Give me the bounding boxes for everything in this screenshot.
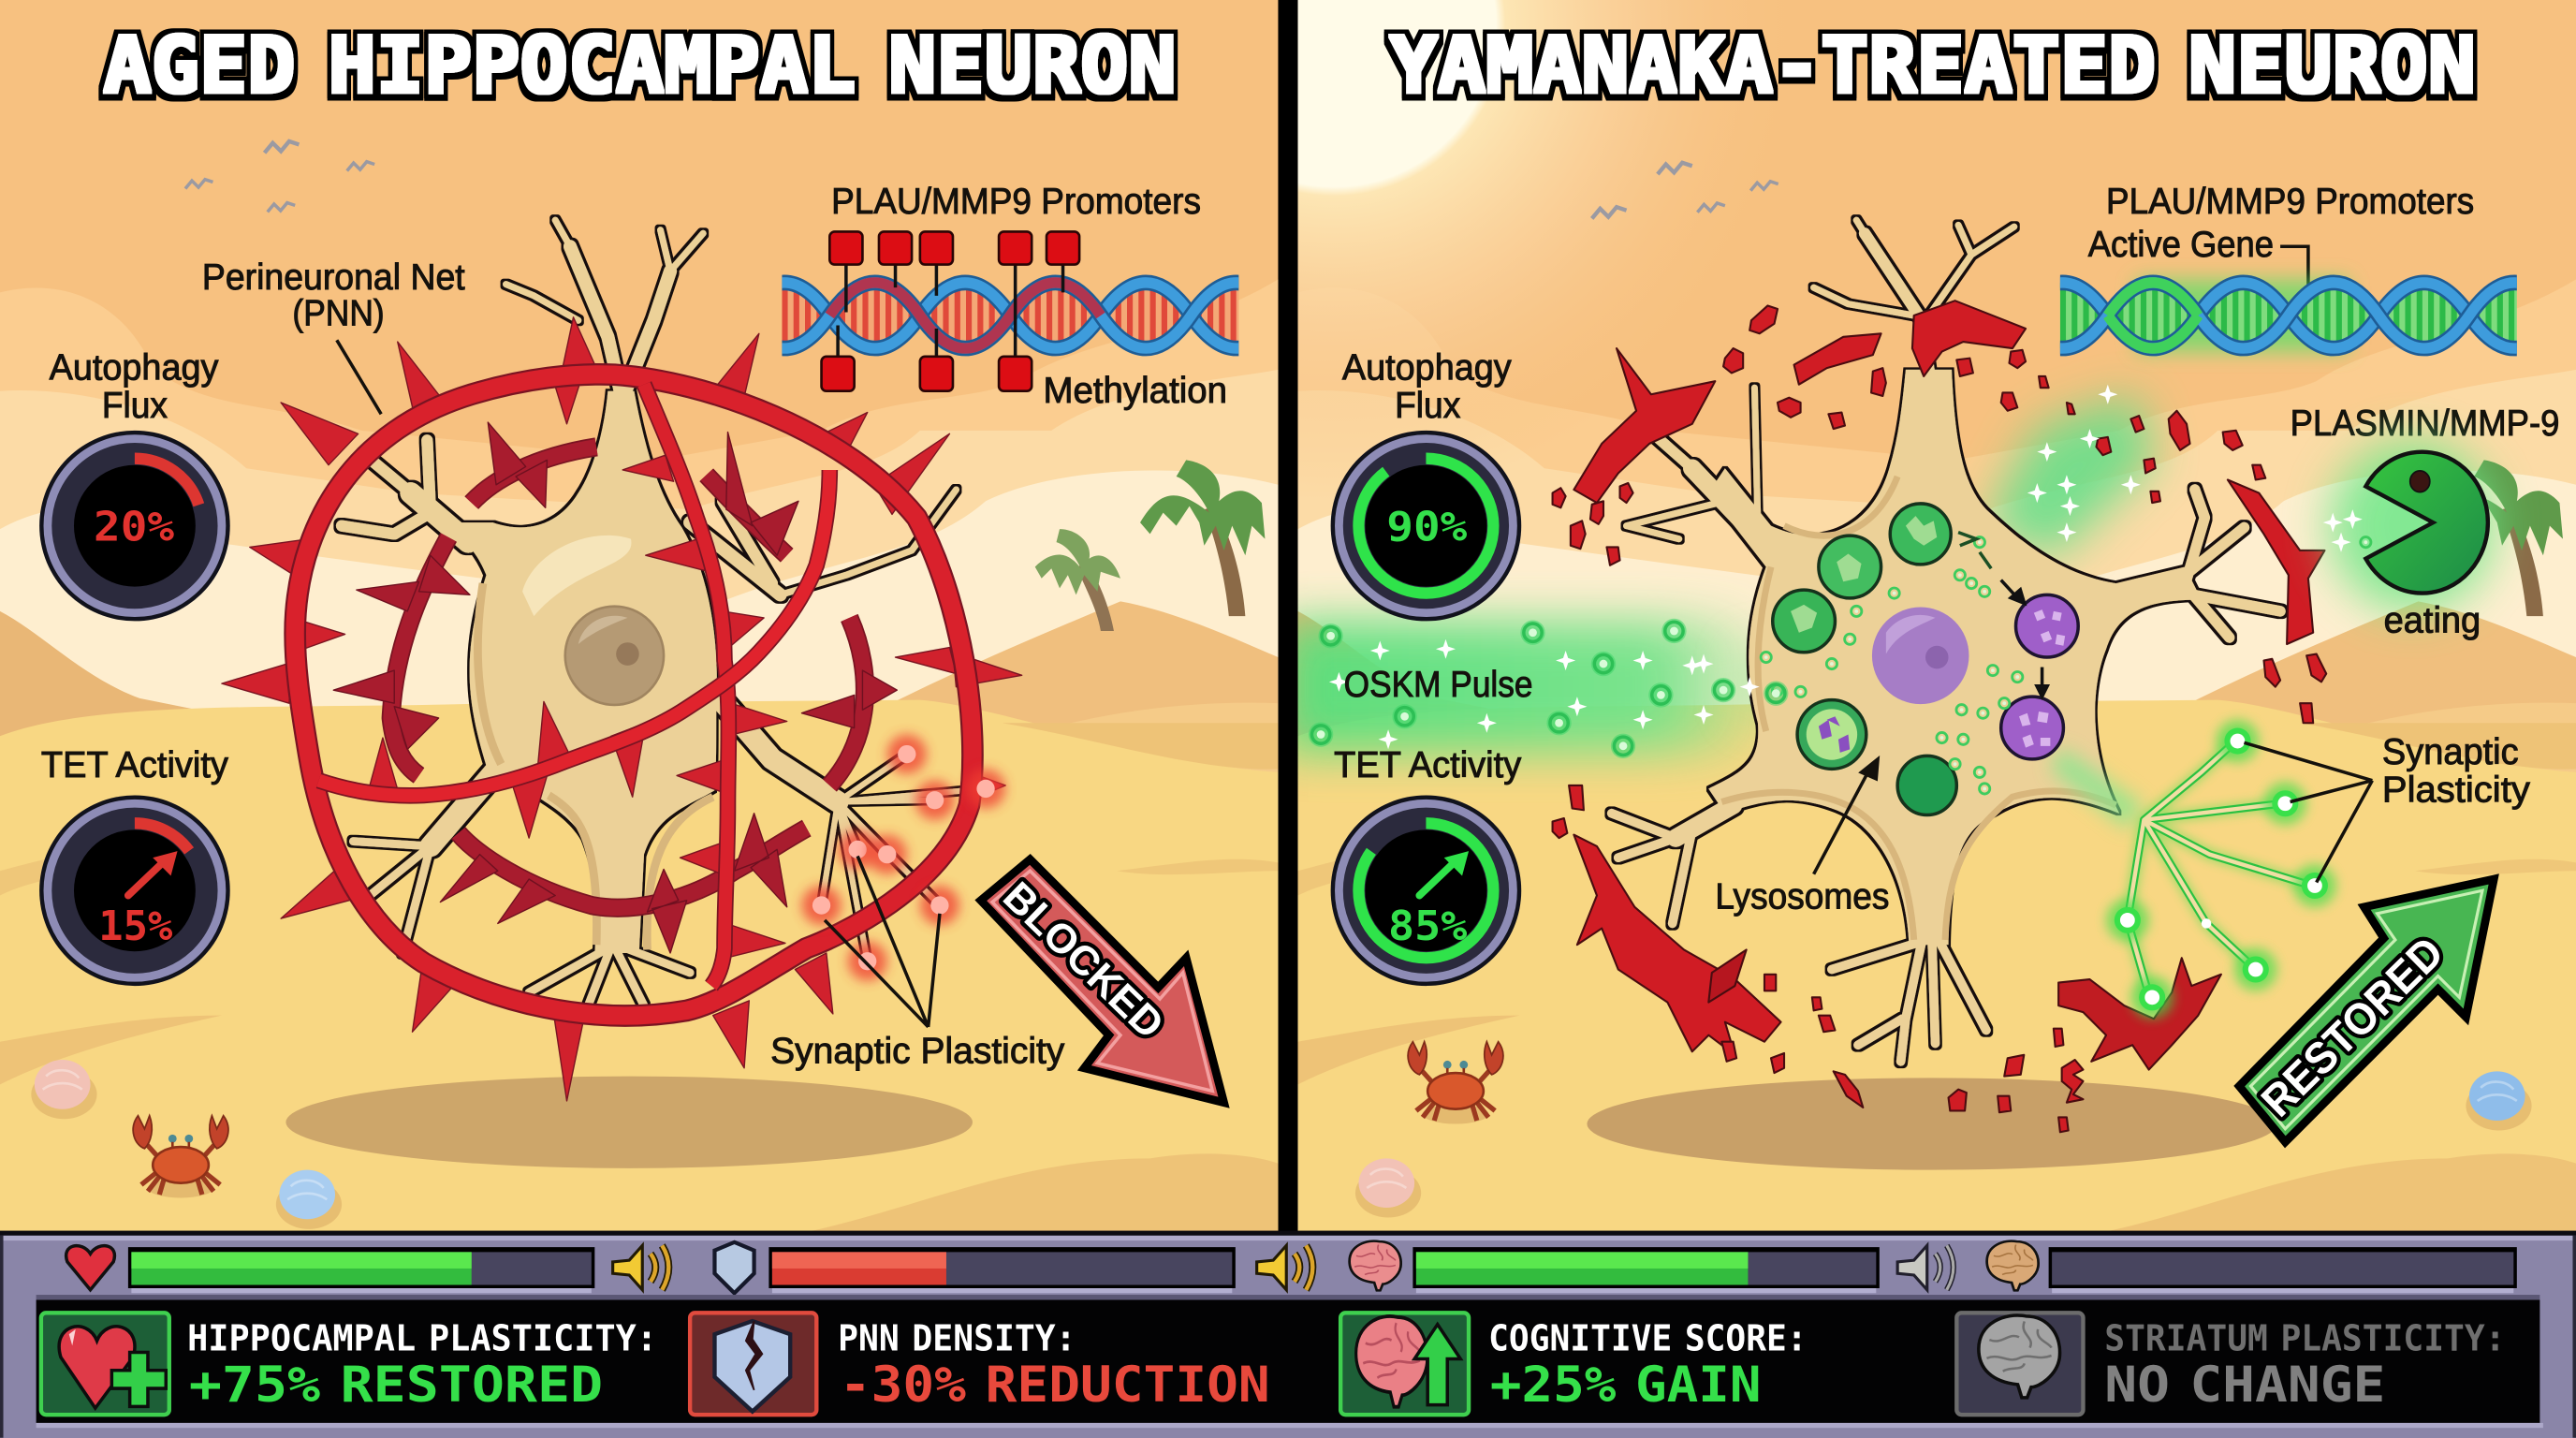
- gauge: TET 85%: 85%: [1388, 902, 1468, 950]
- label: autophagy flux right: Flux: [1395, 386, 1460, 426]
- stat: PNN density: PNN DENSITY:: [838, 1318, 1076, 1360]
- stat: hippocampal plasticity: [41, 1313, 657, 1415]
- label: autophagy flux right: [1342, 347, 1512, 426]
- icon: cracked shield: [690, 1313, 816, 1415]
- label: OSKM pulse: OSKM Pulse: [1344, 665, 1533, 705]
- label: TET activity right: TET Activity: [1334, 745, 1522, 785]
- readout panel: [37, 1299, 2539, 1423]
- perineuronal net of thorns: [222, 317, 1022, 1101]
- OSKM pulse beam: [1281, 621, 1808, 753]
- label: TET activity: TET Activity: [41, 745, 229, 785]
- stat: hippocampal plasticity: HIPPOCAMPAL PLASTICITY:: [187, 1318, 657, 1360]
- synaptic mist: [2050, 748, 2144, 829]
- label: promoters right: PLAU/MMP9 Promoters: [2106, 182, 2474, 222]
- broken net fragments: [1553, 301, 2326, 1132]
- dark inner strands: [333, 422, 897, 953]
- gauge: autophagy 90%: 90%: [1386, 503, 1468, 550]
- label: autophagy flux: Autophagy: [50, 347, 219, 388]
- label: active gene: Active Gene: [2088, 225, 2274, 265]
- treated neuron cell: [1612, 220, 2280, 1062]
- stat: striatum plasticity: [1956, 1313, 2506, 1415]
- stat: striatum plasticity: NO CHANGE: [2104, 1357, 2385, 1414]
- label: autophagy flux: Flux: [102, 386, 168, 426]
- label: autophagy flux right: Autophagy: [1342, 347, 1512, 388]
- arrow: blocked: [981, 859, 1224, 1103]
- stat: cognitive score: COGNITIVE SCORE:: [1488, 1318, 1808, 1360]
- aged neuron cell: [342, 220, 986, 1005]
- ground shadow: [285, 1077, 973, 1168]
- nucleus and autolysosomes: [1872, 594, 2078, 759]
- label: eating: eating: [2384, 601, 2481, 641]
- pink shell: [1355, 1158, 1421, 1218]
- icon: speaker: [613, 1245, 668, 1290]
- label: perineuronal net: Perineuronal Net: [202, 257, 465, 298]
- icon: speaker 2: [1257, 1245, 1312, 1290]
- arrow: restored: RESTORED: [2252, 928, 2453, 1126]
- leader lines right: [1814, 246, 2372, 882]
- status bar: heart: [66, 1246, 594, 1293]
- gauge: autophagy 20%: 20%: [94, 503, 175, 550]
- label: synaptic plasticity right: Synaptic: [2382, 732, 2519, 772]
- gauge: autophagy 20%: [39, 431, 230, 621]
- crab: [1408, 1042, 1503, 1123]
- arrow: blocked: BLOCKED: [994, 873, 1173, 1048]
- stat: PNN density: [690, 1313, 1270, 1415]
- label: autophagy flux: [50, 347, 219, 426]
- glowing synapse fan: [2128, 740, 2311, 1001]
- arrow: restored: [2239, 879, 2494, 1142]
- status bar: striatum brain: [1987, 1241, 2517, 1293]
- icon: muted speaker: [1897, 1245, 1954, 1290]
- birds: [1592, 163, 1778, 218]
- OSKM sparkles: [1309, 385, 2141, 758]
- leader lines: [337, 340, 940, 1027]
- label: methylation: Methylation: [1043, 371, 1227, 411]
- label: lysosomes: Lysosomes: [1715, 877, 1889, 917]
- blue shell: [2466, 1071, 2532, 1131]
- icon: heart plus: [41, 1313, 169, 1415]
- gauge: TET 15%: 15%: [98, 902, 173, 950]
- synapses restored: [2106, 720, 2336, 1019]
- icon: grey brain: [1956, 1313, 2083, 1415]
- gauge: TET 85%: [1331, 795, 1521, 986]
- stat: cognitive score: [1340, 1313, 1808, 1415]
- panel: aged hippocampal neuron: [0, 0, 1298, 1232]
- label: PNN: (PNN): [292, 294, 385, 334]
- synapses blocked: [801, 735, 1005, 981]
- gauge: autophagy 90%: [1331, 431, 1521, 621]
- status bar: shield: [714, 1242, 1236, 1293]
- label: synaptic plasticity right: [2382, 732, 2531, 810]
- label: synaptic plasticity right: Plasticity: [2382, 770, 2531, 810]
- label: plasmin: PLASMIN/MMP-9: [2291, 404, 2559, 444]
- lysosomes: [1773, 504, 1956, 815]
- small arrows in soma: [1958, 533, 2049, 698]
- pink shell: [31, 1060, 97, 1119]
- DNA methylated: [649, 231, 1298, 391]
- blue shell: [276, 1170, 342, 1229]
- methyl groups: [822, 231, 1079, 391]
- ground shadow: [1587, 1078, 2277, 1170]
- small vesicles: [1761, 537, 2023, 794]
- title: treated: YAMANAKA-TREATED NEURON: [1390, 21, 2476, 110]
- label: synaptic plasticity: Synaptic Plasticity: [770, 1032, 1065, 1072]
- birds: [185, 141, 374, 212]
- HUD bottom bar: [0, 1231, 2576, 1438]
- gauge: TET 15%: [39, 795, 230, 986]
- DNA active: [1927, 246, 2576, 385]
- sun: [857, 0, 1810, 501]
- stat: cognitive score: +25% GAIN: [1490, 1357, 1761, 1414]
- stat: hippocampal plasticity: +75% RESTORED: [189, 1357, 603, 1414]
- stat: PNN density: -30% REDUCTION: [840, 1357, 1270, 1414]
- icon: brain up arrow: [1340, 1313, 1469, 1415]
- label: PLAU/MMP9 promoters: PLAU/MMP9 Promoters: [831, 182, 1201, 222]
- stat: striatum plasticity: STRIATUM PLASTICITY:: [2104, 1318, 2506, 1360]
- status bar: cognitive brain: [1350, 1241, 1880, 1293]
- bright strands and thorns: [222, 317, 1022, 1101]
- small palm tree: [1035, 529, 1120, 631]
- title: aged: AGED HIPPOCAMPAL NEURON: [104, 21, 1177, 110]
- icon: pacman enzyme: [2323, 440, 2494, 611]
- nucleus: [565, 607, 664, 705]
- crab: [133, 1116, 228, 1197]
- debris chunks: [1553, 305, 2326, 1132]
- panel: yamanaka-treated neuron: [857, 0, 2576, 1232]
- green mist to DNA: [1984, 394, 2156, 559]
